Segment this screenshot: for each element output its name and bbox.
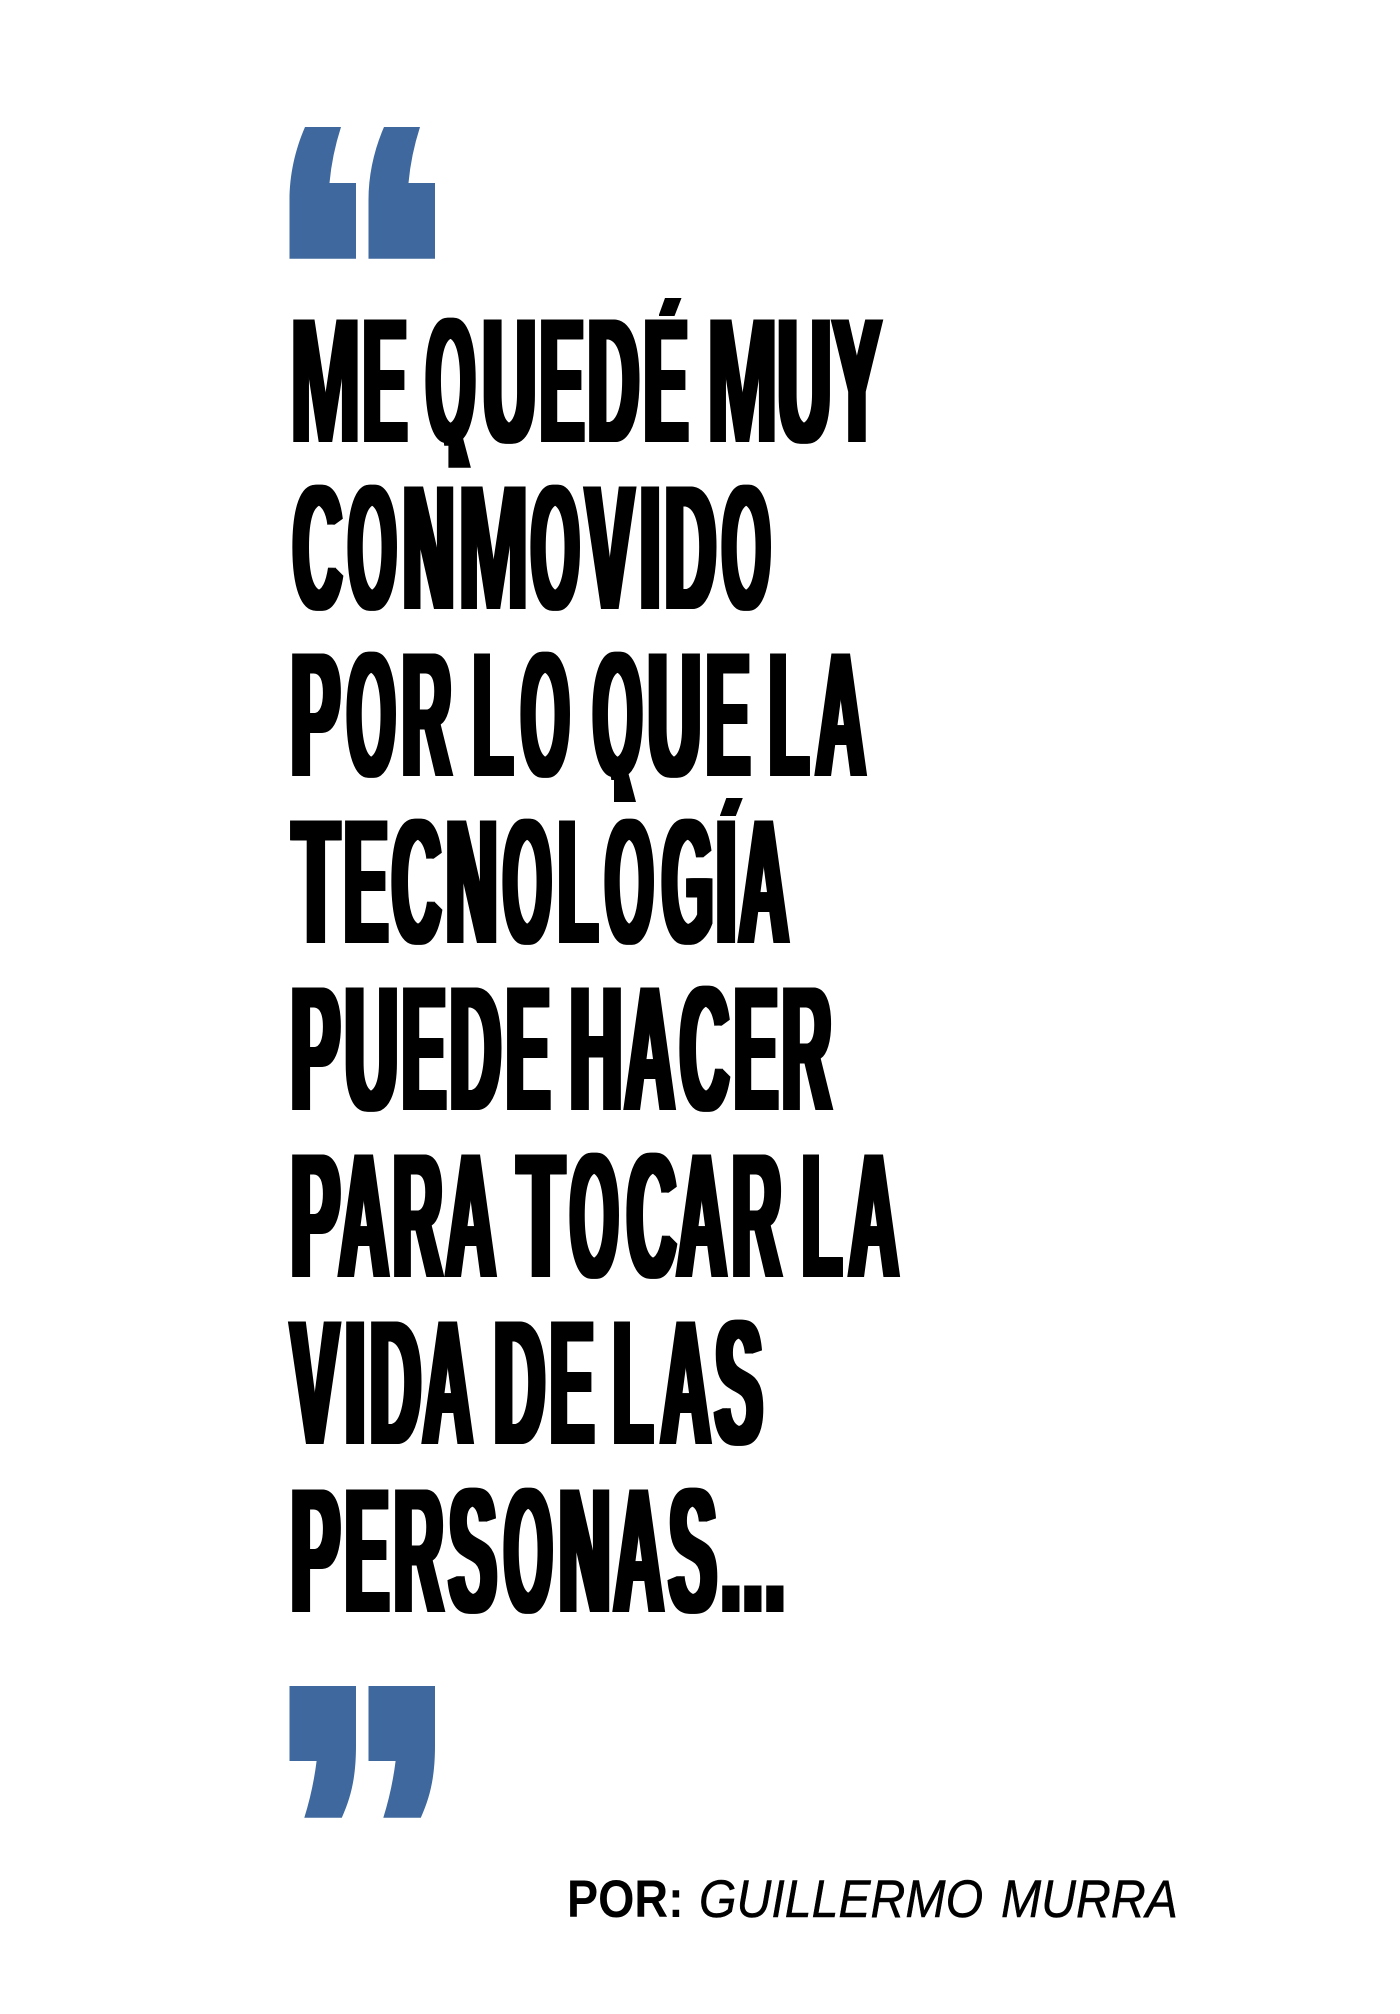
quote line 4: L [558,782,597,981]
quote line 5: E [402,949,446,1148]
quote line 1: U [778,281,830,480]
quote line 4 [290,782,790,981]
quote line 2: O [348,448,396,647]
author credit: POR: [567,1870,684,1929]
quote line 4: G [662,782,713,981]
quote line 6: A [677,1116,726,1315]
author credit: GUILLERMO [699,1870,983,1929]
quote line 7: D [370,1283,421,1482]
quote line 8: . [721,1450,741,1650]
quote line 3: O [347,615,396,814]
quote line 6: T [518,1116,564,1315]
quote line 7: I [345,1283,365,1482]
quote line 6: L [802,1116,842,1315]
quote line 5: R [782,949,831,1148]
quote line 6: A [849,1116,898,1315]
quote line 2 [292,448,771,647]
author credit: MURRA [1001,1870,1178,1929]
quote line 5: E [734,949,777,1148]
quote line 7: S [715,1283,762,1482]
icon: opening quotation mark [290,127,435,259]
quote line 3: O [521,615,570,814]
heading: quotation text [288,281,900,1650]
quote line 7: L [613,1283,653,1482]
quote line 2: C [293,448,342,647]
quote line 2: I [640,448,660,647]
quote line 8: . [743,1450,763,1650]
quote line 7: V [291,1283,339,1482]
quote line 8: N [559,1450,611,1650]
quote line 5: E [506,949,550,1148]
quote line 1 [290,281,884,480]
quote line 8: O [504,1450,553,1650]
quote line 8: E [345,1450,389,1650]
quote line 5: H [570,949,622,1148]
quote line 4: Í [716,782,736,981]
quote line 3 [291,615,868,814]
quote line 1: E [540,281,584,480]
quote line 8: S [669,1450,716,1650]
quote line 6 [291,1116,900,1315]
quote line 8: . [765,1450,785,1650]
quote line 3: A [816,615,866,814]
author credit [567,1870,1178,1929]
quote line 5: P [291,949,340,1148]
quote line 2: N [403,448,454,647]
quote line 6: A [446,1116,495,1315]
quote line 6: C [627,1116,676,1315]
quote line 1: Y [833,281,881,480]
quote line 1: E [362,281,406,480]
quote line 8: S [449,1450,496,1650]
quote line 4: E [344,782,388,981]
quote line 7: E [550,1283,594,1482]
quote line 2: D [665,448,716,647]
quote line 6: R [393,1116,442,1315]
quote line 1: U [482,281,535,480]
quote line 4: A [739,782,789,981]
quote line 2: M [458,448,529,647]
quote line 8: P [291,1450,340,1650]
quote line 7: A [660,1283,710,1482]
quote line 5: D [450,949,501,1148]
quote line 3: Q [593,615,642,814]
quote line 2: O [722,448,771,647]
quote line 1: M [707,281,778,480]
quote line 4: O [605,782,654,981]
quote line 3: E [706,615,750,814]
quote line 2: O [531,448,580,647]
quote line 5: A [625,949,674,1148]
quote line 8: R [394,1450,443,1650]
quote line 1: Q [426,281,475,480]
quote line 3: U [648,615,701,814]
quote line 4: N [446,782,497,981]
quote line 5 [291,949,834,1148]
quote line 7: D [494,1283,545,1482]
quote line 3: L [473,615,513,814]
quote line 6: O [570,1116,618,1315]
quote line 7 [288,1283,764,1482]
quote line 2: V [586,448,634,647]
quote line 1: M [290,281,361,480]
quote line 1: D [588,281,639,480]
quote line 3: L [769,615,809,814]
quote line 7: A [423,1283,472,1482]
quote line 4: C [392,782,441,981]
quote line 6: A [338,1116,388,1315]
quote line 4: T [293,782,339,981]
icon: closing quotation mark [290,1686,435,1818]
quote line 1: É [644,281,688,480]
quote line 6: P [291,1116,340,1315]
quote line 3: R [402,615,452,814]
quote line 5: C [680,949,729,1148]
quote line 8: A [614,1450,663,1650]
quote line 8 [291,1450,785,1650]
quote line 4: O [503,782,552,981]
quote line 5: U [345,949,398,1148]
quote line 6: R [732,1116,781,1315]
quote line 3: P [291,615,340,814]
